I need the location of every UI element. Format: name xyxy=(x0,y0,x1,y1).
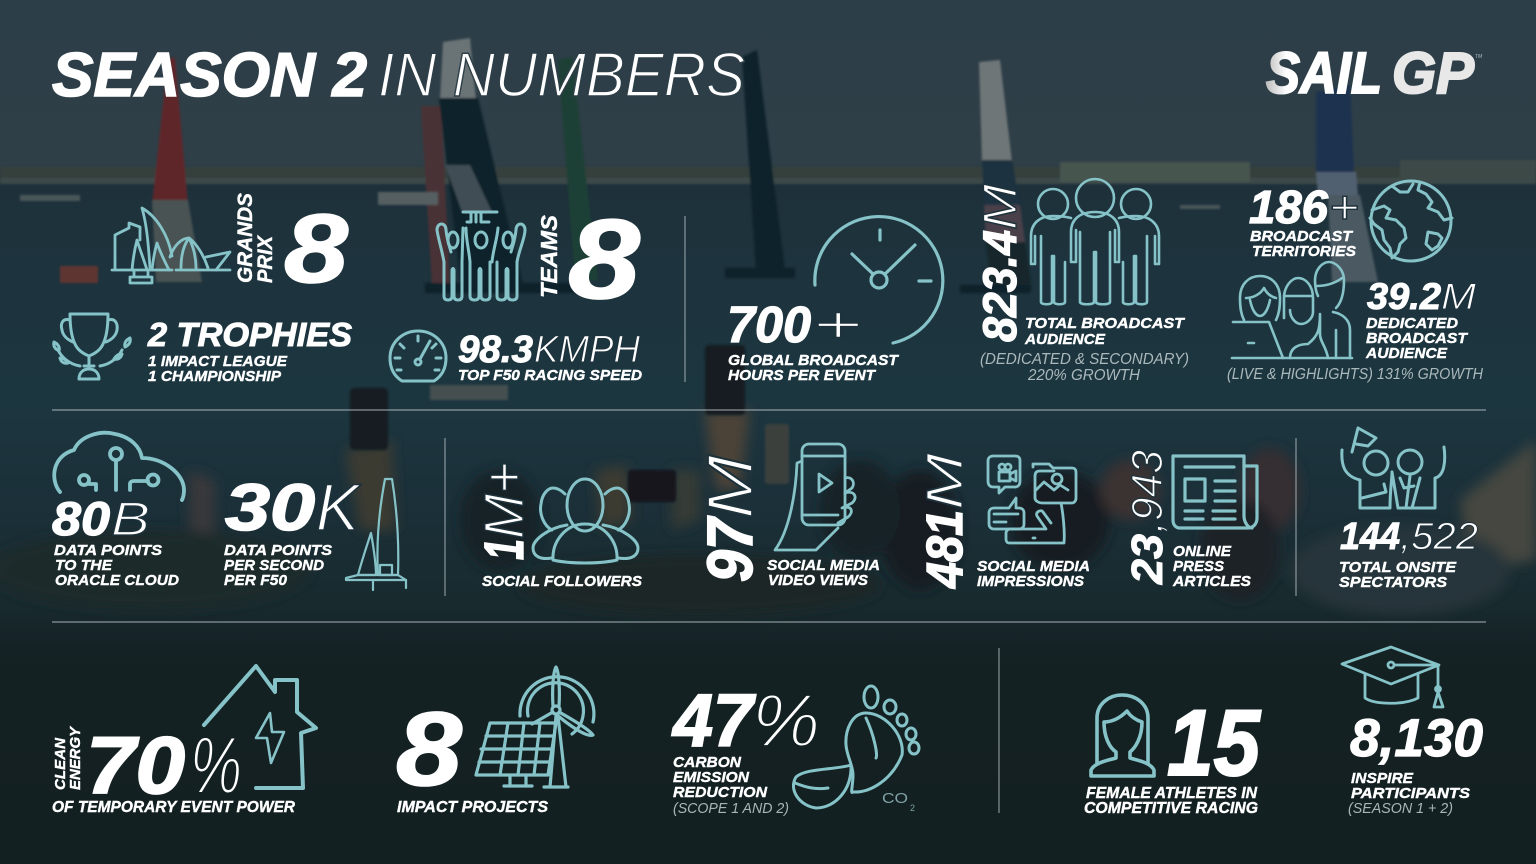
icon: Sydney Opera House xyxy=(112,208,230,283)
stat: inspire participants xyxy=(1342,647,1483,817)
stat: video views xyxy=(694,444,880,589)
stat: onsite spectators: ,522 xyxy=(1400,516,1478,558)
stat: carbon reduction: REDUCTION xyxy=(673,784,768,801)
title xyxy=(52,41,745,110)
note: (DEDICATED & SECONDARY) xyxy=(980,351,1189,368)
icon: clock xyxy=(815,217,943,343)
stat: dedicated broadcast audience: M xyxy=(1441,276,1476,317)
stat: broadcast territories xyxy=(1249,181,1452,261)
label: DEDICATED xyxy=(1366,315,1458,332)
icon: group of people xyxy=(533,479,638,563)
stat: total broadcast audience: M xyxy=(973,183,1026,230)
value: 98.3 xyxy=(458,329,533,371)
icon: hand holding phone xyxy=(775,444,855,550)
stat: social impressions xyxy=(916,452,1090,590)
stat: broadcast territories: TERRITORIES xyxy=(1252,243,1356,260)
value: 80 xyxy=(52,492,110,545)
icon: female athlete xyxy=(1091,695,1154,776)
stat: inspire participants: (SEASON 1 + 2) xyxy=(1348,800,1453,817)
title: IN NUMBERS xyxy=(378,41,745,110)
label: 1 IMPACT LEAGUE xyxy=(148,353,288,370)
stat: data points per second: PER SECOND xyxy=(224,557,324,574)
DEN sail xyxy=(152,58,188,205)
label: TOTAL ONSITE xyxy=(1339,559,1457,576)
stat: broadcast territories: + xyxy=(1329,181,1359,233)
label: SOCIAL MEDIA xyxy=(767,557,880,574)
label: CARBON xyxy=(673,754,742,771)
stat: data points per second xyxy=(224,470,406,590)
stat: grands prix: PRIX xyxy=(254,234,277,283)
label rotated: CLEAN xyxy=(52,737,69,790)
stat: trophies xyxy=(54,314,352,385)
value: 70 xyxy=(86,721,185,811)
stat: video views: M xyxy=(694,454,766,519)
stat: teams xyxy=(437,196,640,322)
stat: press articles xyxy=(1123,449,1257,590)
value: 15 xyxy=(1167,690,1262,795)
stat: broadcast hours xyxy=(727,217,943,384)
value: 8,130 xyxy=(1350,709,1483,768)
label: OF TEMPORARY EVENT POWER xyxy=(52,799,295,816)
CO2 label xyxy=(882,790,915,813)
stat: onsite spectators: SPECTATORS xyxy=(1339,574,1447,591)
CO2 label: 2 xyxy=(910,803,915,813)
stat: social followers xyxy=(472,462,642,590)
stat: press articles: PRESS xyxy=(1173,558,1224,575)
stat: carbon reduction: (SCOPE 1 AND 2) xyxy=(673,800,789,817)
value: 47 xyxy=(671,679,757,762)
GBR sail xyxy=(979,60,1012,162)
stat: press articles: ARTICLES xyxy=(1172,573,1251,590)
icon: house with bolt xyxy=(204,666,316,788)
value: 30 xyxy=(225,470,315,544)
stat: top speed xyxy=(390,329,642,384)
label: BROADCAST xyxy=(1250,228,1354,245)
stat: clean energy xyxy=(52,666,316,816)
value: 23 xyxy=(1123,534,1172,585)
stat: dedicated broadcast audience: BROADCAST xyxy=(1366,330,1469,347)
label: IMPACT PROJECTS xyxy=(397,799,548,816)
label: TEAMS xyxy=(536,214,562,298)
icon: trophy with laurels xyxy=(54,314,130,379)
value: 144 xyxy=(1340,516,1400,558)
stat: social impressions: M xyxy=(916,452,973,510)
stat: social impressions: IMPRESSIONS xyxy=(977,573,1084,590)
stat: top speed: KMPH xyxy=(534,329,641,371)
label: GLOBAL BROADCAST xyxy=(728,352,900,369)
stat: broadcast hours: + xyxy=(812,296,862,353)
stat: data points per second: K xyxy=(316,470,362,544)
icon: three people xyxy=(1031,179,1159,304)
label: TOTAL BROADCAST xyxy=(1025,315,1186,332)
icon: graduation cap xyxy=(1342,647,1443,707)
stat: female athletes: COMPETITIVE RACING xyxy=(1084,800,1258,817)
label: FEMALE ATHLETES IN xyxy=(1086,785,1258,802)
stat: data points to Oracle cloud: B xyxy=(111,492,150,545)
stat: carbon reduction: % xyxy=(752,679,820,762)
label: TOP F50 RACING SPEED xyxy=(458,367,642,384)
icon: cheering spectators xyxy=(1342,428,1445,508)
AUS sail xyxy=(558,57,598,280)
stat: clean energy: % xyxy=(190,721,242,811)
stat: total broadcast audience: AUDIENCE xyxy=(1024,331,1106,348)
label: SOCIAL MEDIA xyxy=(977,558,1090,575)
value: 97 xyxy=(694,515,766,582)
stat: total broadcast audience: 220% GROWTH xyxy=(1027,367,1141,384)
icon: solar panel and wind turbine xyxy=(476,667,594,787)
CO2 label: CO xyxy=(882,790,908,807)
stat: data points to Oracle cloud xyxy=(52,433,184,589)
icon: speedometer xyxy=(390,331,446,381)
note: (LIVE & HIGHLIGHTS) 131% GROWTH xyxy=(1227,366,1484,383)
stat: dedicated broadcast audience: AUDIENCE xyxy=(1365,345,1448,362)
stat: video views: VIDEO VIEWS xyxy=(768,572,868,589)
USA sail xyxy=(742,50,785,270)
value: 8 xyxy=(568,196,640,322)
icon: CO2 footprint with leaf xyxy=(793,686,919,808)
stat: broadcast hours: HOURS PER EVENT xyxy=(728,367,877,384)
stat: data points to Oracle cloud: TO THE xyxy=(55,557,113,574)
stat: total broadcast audience xyxy=(973,179,1189,384)
label: DATA POINTS xyxy=(224,542,332,559)
stat: trophies: 1 CHAMPIONSHIP xyxy=(148,368,282,385)
value: 700 xyxy=(727,296,811,353)
stat: impact projects xyxy=(396,667,594,816)
value: 2 TROPHIES xyxy=(147,316,352,353)
label: ONLINE xyxy=(1173,543,1232,560)
value: 8 xyxy=(396,691,463,808)
stat: grands prix xyxy=(112,193,348,303)
stat: inspire participants: PARTICIPANTS xyxy=(1351,785,1470,802)
stat: data points to Oracle cloud: ORACLE CLOUD xyxy=(55,572,179,589)
value: 823.4 xyxy=(973,230,1026,342)
label: SOCIAL FOLLOWERS xyxy=(482,573,642,590)
stat: carbon reduction: EMISSION xyxy=(673,769,750,786)
icon: F50 catamaran xyxy=(346,479,406,590)
stat: onsite spectators xyxy=(1339,428,1478,591)
NZL sail xyxy=(440,38,476,100)
SailGP logo xyxy=(1266,41,1483,106)
stat: social followers: M+ xyxy=(472,462,535,539)
value: 481 xyxy=(916,510,973,589)
stat: data points per second: PER F50 xyxy=(224,572,288,589)
value: 8 xyxy=(284,194,348,303)
SailGP logo: SAIL xyxy=(1266,41,1382,106)
icon: newspaper xyxy=(1173,456,1257,528)
dividers xyxy=(52,216,1486,813)
FRA sail xyxy=(1316,85,1354,172)
stat: dedicated broadcast audience xyxy=(1227,262,1484,383)
label: INSPIRE xyxy=(1351,770,1414,787)
title: SEASON 2 xyxy=(52,41,367,110)
value: 186 xyxy=(1249,181,1328,233)
stat: carbon reduction xyxy=(671,679,919,817)
icon: team celebrating xyxy=(437,212,525,300)
stat: press articles: ,943 xyxy=(1123,449,1172,533)
boats on water xyxy=(60,266,98,283)
icon: viewers with laptop xyxy=(1232,262,1352,358)
icon: globe xyxy=(1370,181,1452,261)
stat: female athletes xyxy=(1084,690,1262,817)
label: GRANDS xyxy=(234,193,257,283)
icon: social media content xyxy=(988,456,1076,543)
label: DATA POINTS xyxy=(54,542,162,559)
SailGP logo: GP xyxy=(1392,41,1474,106)
icon: data cloud xyxy=(54,433,184,500)
SailGP logo: TM xyxy=(1475,54,1483,60)
stat: clean energy: ENERGY xyxy=(67,725,84,790)
value: 39.2 xyxy=(1367,276,1441,317)
value: 1 xyxy=(472,539,535,560)
